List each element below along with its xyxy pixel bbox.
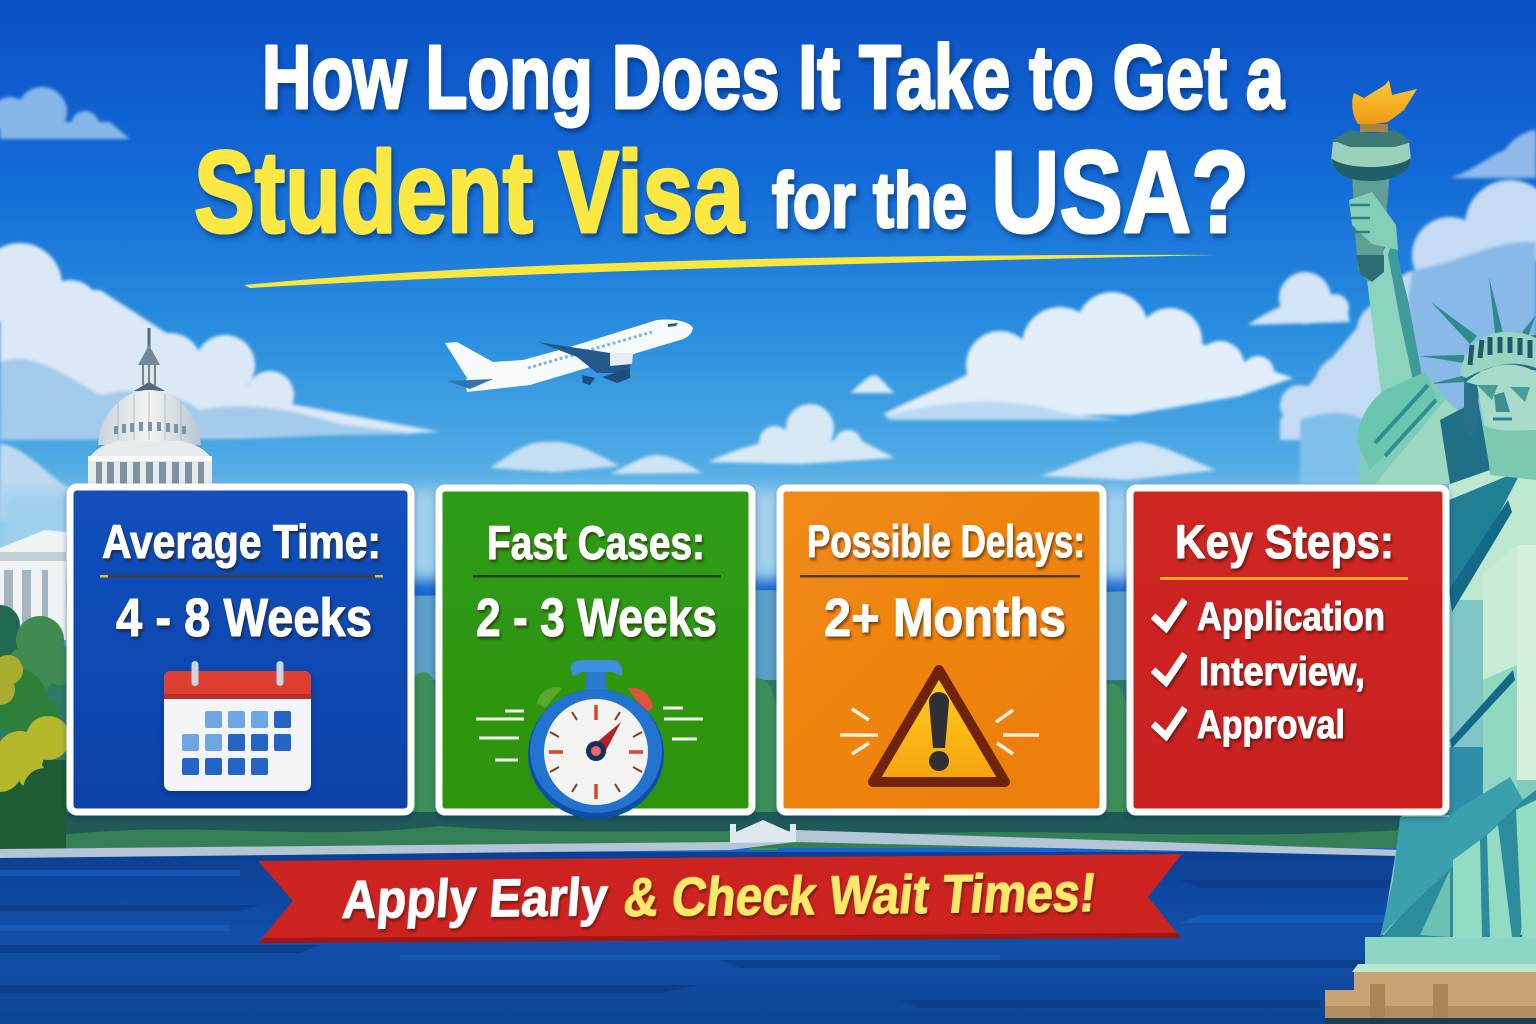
clouds (0, 87, 1536, 522)
raised arm (1367, 228, 1422, 418)
face (1466, 365, 1536, 431)
step: interview: Interview, (1199, 650, 1365, 694)
neck (1485, 420, 1536, 480)
title (194, 28, 1285, 288)
underline swoosh (244, 255, 1216, 288)
cloud: top left (0, 87, 130, 139)
card: fast cases (439, 488, 752, 819)
icon: warning triangle (840, 670, 1039, 782)
water (0, 852, 1536, 1024)
icon: calendar (164, 661, 311, 791)
shoreline promenade (0, 820, 1400, 858)
wing (538, 342, 632, 373)
card heading: Average Time: (102, 515, 381, 568)
card value: 2 - 3 Weeks (476, 588, 717, 648)
title word: USA?: USA? (991, 127, 1249, 257)
card: average time (70, 487, 411, 812)
step: approval (1153, 703, 1345, 747)
drum (88, 441, 212, 486)
windows (528, 332, 652, 368)
robe folds upper (1449, 440, 1536, 600)
base (1325, 972, 1536, 1018)
banner text yellow: & Check Wait Times! (621, 863, 1099, 928)
banner text white: Apply Early (340, 867, 610, 930)
wing (0, 530, 66, 640)
hair (1464, 335, 1536, 440)
robe body (1359, 372, 1536, 935)
distant horizon haze (0, 490, 1536, 720)
crown (1460, 332, 1536, 378)
dome (98, 390, 201, 445)
sky background (0, 0, 1536, 560)
pedestal (1365, 937, 1536, 966)
torch handle (1352, 172, 1390, 282)
cross and lantern (134, 328, 165, 391)
card background (70, 487, 411, 812)
icon: stopwatch (476, 660, 703, 819)
card heading: Possible Delays: (807, 516, 1085, 567)
tree line and shore (0, 672, 1536, 850)
sleeve folds (1357, 372, 1438, 470)
card: possible delays (780, 488, 1103, 812)
card background (1130, 488, 1446, 812)
ribbon banner (258, 854, 1182, 943)
cloud: right large (1280, 180, 1536, 484)
flame (1352, 80, 1417, 125)
ribbon shape (258, 854, 1182, 943)
airplane (445, 319, 693, 392)
step: approval: Approval (1197, 703, 1345, 747)
hand (1349, 192, 1398, 250)
crown rays (1420, 277, 1536, 384)
cloud: centre right (882, 292, 1293, 420)
step: application: Application (1197, 595, 1385, 639)
card background (780, 488, 1103, 812)
cloud: upper right small (1248, 272, 1350, 325)
cloud: left large (0, 243, 440, 522)
cloud: low centre (708, 404, 895, 464)
cloud: small centre (850, 375, 895, 393)
cockpit (668, 323, 678, 327)
cloud: top right small (1450, 130, 1536, 178)
lower drape (1380, 777, 1523, 937)
title words: for the: for the (772, 156, 967, 244)
card heading: Key Steps: (1175, 515, 1394, 568)
card value: 2+ Months (824, 588, 1066, 648)
trees left (0, 605, 80, 850)
card background (439, 488, 752, 812)
fuselage and tail fin (445, 319, 693, 392)
torch cup (1331, 142, 1411, 180)
engines (610, 353, 633, 366)
tail plane (447, 379, 493, 389)
card value: 4 - 8 Weeks (116, 588, 372, 648)
speed lines (476, 708, 703, 760)
capitol building (0, 328, 212, 640)
card heading: Fast Cases: (487, 516, 705, 569)
card: key steps (1130, 488, 1446, 812)
title word: Student Visa: Student Visa (194, 127, 745, 257)
statue of liberty (1325, 80, 1536, 1024)
